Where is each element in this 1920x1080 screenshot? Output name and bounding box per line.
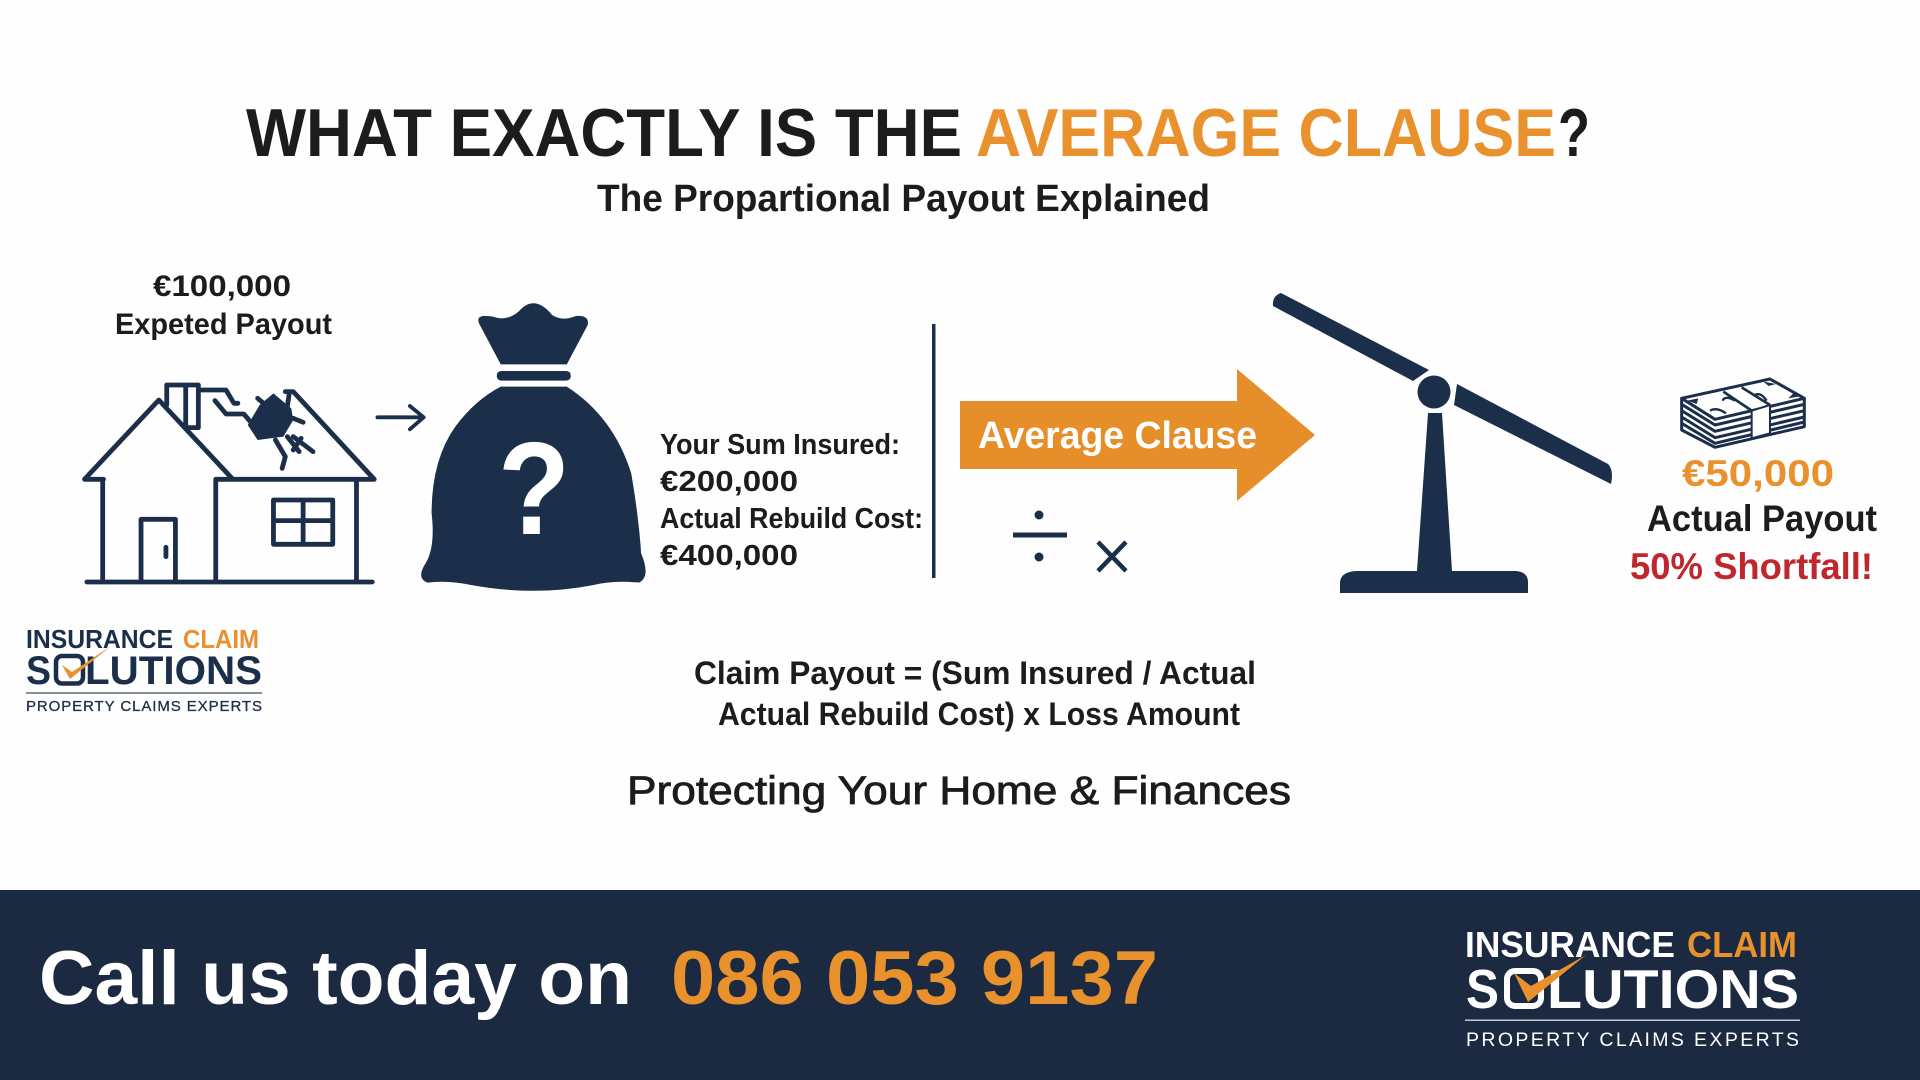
tagline: Protecting Your Home & Finances xyxy=(627,769,1291,813)
footer logo: CLAIM xyxy=(1687,924,1797,965)
formula: Actual Rebuild Cost) x Loss Amount xyxy=(718,696,1240,732)
small logo: LUTIONS xyxy=(85,649,262,693)
footer logo: S xyxy=(1466,958,1499,1020)
icon: multiply sign xyxy=(1098,542,1126,571)
actual payout result: €50,000 xyxy=(1682,453,1834,494)
icon: money bag with question mark xyxy=(421,303,646,591)
icon: tilted balance scale xyxy=(1273,293,1612,593)
sum insured and rebuild cost text: Actual Rebuild Cost: xyxy=(660,503,923,535)
footer logo: LUTIONS xyxy=(1547,958,1799,1020)
arrow: house to money bag xyxy=(377,406,424,429)
actual payout result: 50% Shortfall! xyxy=(1630,546,1873,587)
footer logo xyxy=(1465,924,1800,1051)
footer banner xyxy=(0,890,1920,1080)
arrow: average clause: Average Clause xyxy=(978,415,1257,457)
subtitle: The Propartional Payout Explained xyxy=(597,178,1210,220)
small logo: CLAIM xyxy=(183,624,259,654)
phone number: 086 053 9137 xyxy=(671,936,1158,1021)
title xyxy=(246,95,1590,171)
title: ? xyxy=(1558,95,1590,171)
icon: money bag with question mark: ? xyxy=(498,415,570,562)
title: AVERAGE CLAUSE xyxy=(976,95,1556,171)
footer logo: PROPERTY CLAIMS EXPERTS xyxy=(1466,1029,1799,1051)
expected payout label: €100,000 xyxy=(153,270,291,303)
icon: stack of banknotes xyxy=(1682,379,1804,447)
small logo: PROPERTY CLAIMS EXPERTS xyxy=(26,698,262,715)
footer logo: O xyxy=(1503,958,1545,1020)
small logo: O xyxy=(54,649,84,693)
actual payout result xyxy=(1630,453,1877,587)
icon: divide sign xyxy=(1013,510,1067,562)
sum insured and rebuild cost text: Your Sum Insured: xyxy=(660,429,900,461)
sum insured and rebuild cost text xyxy=(660,429,923,572)
expected payout label xyxy=(115,270,332,341)
sum insured and rebuild cost text: €200,000 xyxy=(660,466,798,498)
formula: Claim Payout = (Sum Insured / Actual xyxy=(694,655,1256,691)
small logo: S xyxy=(26,649,51,693)
footer logo: INSURANCE xyxy=(1465,924,1675,965)
call to action: Call us today on xyxy=(39,936,632,1021)
sum insured and rebuild cost text: €400,000 xyxy=(660,540,798,572)
actual payout result: Actual Payout xyxy=(1647,498,1877,539)
small logo: INSURANCE xyxy=(26,624,173,654)
arrow: average clause xyxy=(960,369,1315,501)
icon: damaged house xyxy=(85,385,374,582)
small logo xyxy=(26,624,262,715)
title: WHAT EXACTLY IS THE xyxy=(246,95,962,171)
expected payout label: Expeted Payout xyxy=(115,308,332,341)
formula xyxy=(694,655,1256,732)
